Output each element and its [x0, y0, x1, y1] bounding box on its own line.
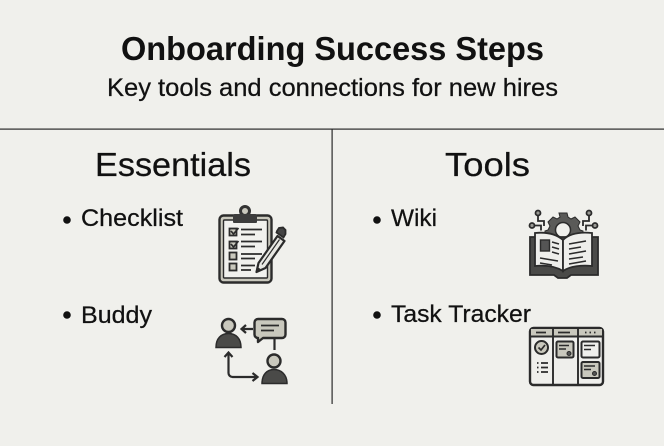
icon: clipboard checklist with pencil	[220, 206, 286, 282]
icon: open book with gear	[530, 210, 598, 278]
heading: essentials: Essentials	[95, 146, 251, 183]
vertical divider	[332, 129, 333, 404]
icon: buddy conversation	[216, 319, 287, 384]
subtitle: Key tools and connections for new hires	[107, 74, 558, 102]
panel: tools	[373, 146, 603, 385]
bullet: wiki: Wiki	[391, 205, 437, 232]
bullet: task tracker: Task Tracker	[391, 301, 531, 328]
title: Onboarding Success Steps	[121, 30, 544, 67]
person bottom	[262, 354, 287, 384]
panel: essentials	[63, 146, 287, 384]
icon: kanban task board	[530, 328, 603, 385]
bullet: checklist: Checklist	[81, 205, 183, 232]
person top	[216, 319, 241, 348]
heading: tools: Tools	[445, 146, 530, 183]
horizontal divider	[0, 128, 664, 130]
bullet: buddy: Buddy	[81, 302, 152, 329]
